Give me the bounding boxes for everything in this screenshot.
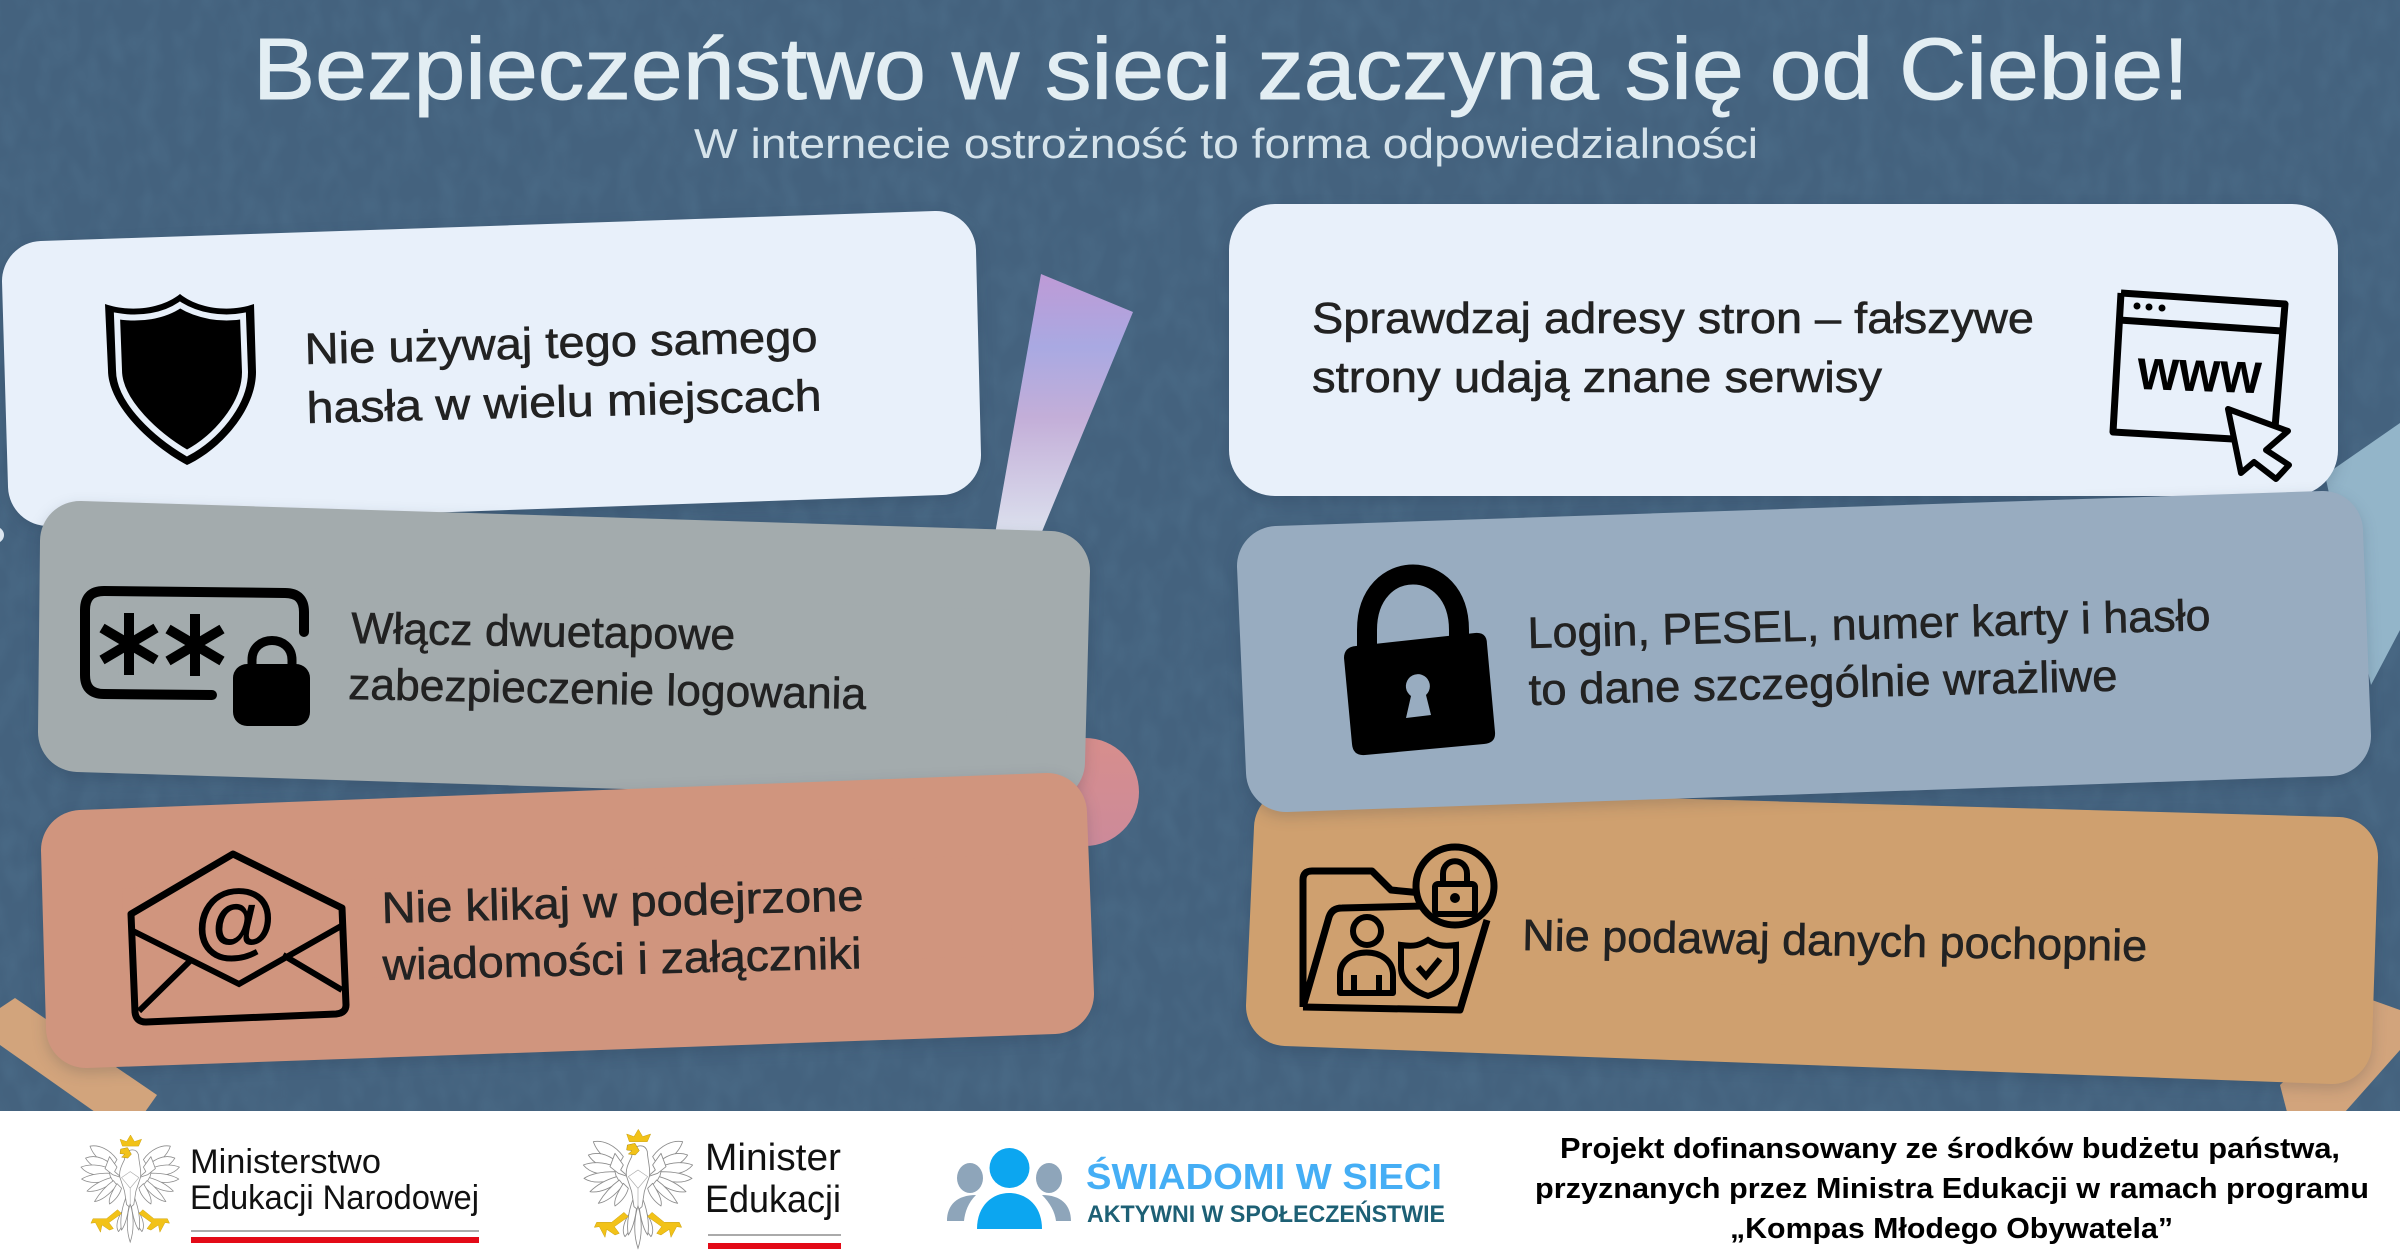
icon: envelope: @ [194,872,276,966]
panel: suspicious messages [81,813,1054,1028]
text: Nie używaj tego samego [304,312,818,374]
text [348,604,867,719]
logo: Świadomi w sieci [947,1148,1445,1229]
text: Włącz dwuetapowe [351,604,736,660]
panel: check addresses [1229,204,2338,496]
icon: eagle [583,1129,693,1248]
footer [0,1111,2400,1260]
icon: shield [105,294,256,465]
card background [81,813,1054,1028]
card background [78,541,1050,762]
card background [1277,531,2331,772]
icon: www browser window: www [2136,337,2264,406]
icon: envelope [131,854,346,1022]
text [1527,591,2211,715]
icon: password and padlock [85,591,310,726]
card background [42,251,941,486]
icon: www browser window [2113,293,2289,479]
title: Bezpieczeństwo w sieci zaczyna się od Ciebie! [253,21,2189,118]
logo: Minister Edukacji: Edukacji [705,1179,841,1221]
icon: folder with lock [1303,847,1494,1010]
text [381,871,864,990]
text: Nie klikaj w podejrzone [381,871,864,933]
card background [1286,828,2338,1044]
icon: padlock [1344,574,1495,755]
decorative shape: left edge blob [0,527,4,543]
text: to dane szczególnie wrażliwe [1528,652,2118,715]
text: Sprawdzaj adresy stron – fałszywe [1312,294,2034,343]
text [304,312,822,433]
decorative shape: light blue right [2325,423,2400,685]
text: hasła w wielu miejscach [306,371,822,433]
panel: two-factor [78,541,1050,762]
text: strony udają znane serwisy [1312,353,1882,402]
panel: orange personal data [1286,828,2338,1044]
text: wiadomości i załączniki [381,929,862,990]
logo: Ministerstwo Edukacji Narodowej: Edukacji Narodowej [190,1179,479,1217]
logo: Świadomi w sieci: AKTYWNI W SPOŁECZEŃSTWIE [1087,1200,1445,1228]
logo: Minister Edukacji [583,1129,841,1249]
panel: sensitive data [1277,531,2331,772]
logo: Ministerstwo Edukacji Narodowej: Ministerstwo [190,1143,381,1181]
icon: eagle [81,1135,179,1242]
funding note: „Kompas Młodego Obywatela” [1730,1213,2173,1245]
funding note: przyznanych przez Ministra Edukacji w ramach programu [1535,1173,2369,1205]
subtitle: W internecie ostrożność to forma odpowiedzialności [694,120,1758,167]
text [1312,294,2034,402]
funding note: Projekt dofinansowany ze środków budżetu państwa, [1560,1133,2340,1165]
decorative shape: tan strip right [2280,1000,2400,1112]
decorative shape: pink circle [1031,738,1139,846]
funding note [1535,1133,2369,1245]
decorative shape: purple strip [995,274,1133,534]
text: Login, PESEL, numer karty i hasło [1527,591,2211,658]
icon: people [947,1148,1071,1229]
card background [1229,204,2338,496]
text: Nie podawaj danych pochopnie [1522,911,2148,971]
logo: Ministerstwo Edukacji Narodowej [81,1135,479,1243]
decorative shape: tan strip left [0,998,157,1112]
logo: Świadomi w sieci: ŚWIADOMI W SIECI [1086,1155,1442,1197]
logo: Minister Edukacji: Minister [705,1137,841,1179]
text: zabezpieczenie logowania [348,660,867,719]
panel: reused passwords [42,251,941,486]
